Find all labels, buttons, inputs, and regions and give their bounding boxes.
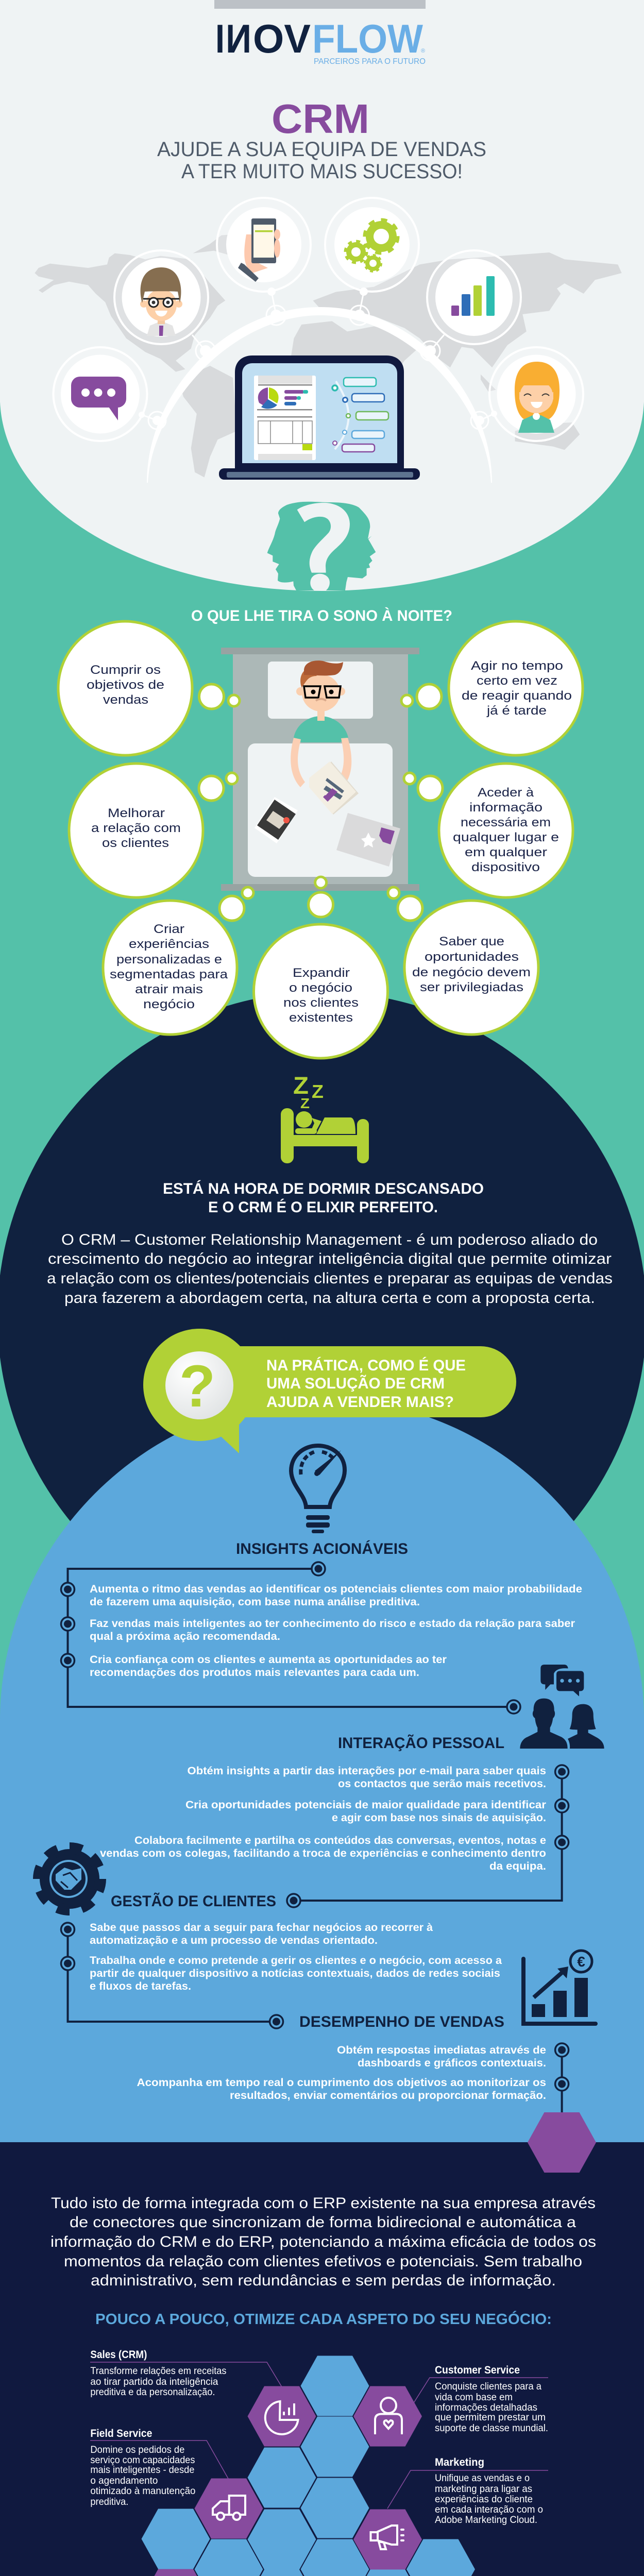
- bubble: Criar experiências: negócio: [143, 997, 195, 1011]
- bubble: Aceder à informação: [439, 764, 573, 897]
- icon: sales chart with euro: €: [577, 1954, 585, 1970]
- text: Sales (CRM): ao tirar partido da inteligência: [90, 2377, 218, 2387]
- text: Marketing: marketing para ligar as: [435, 2484, 532, 2495]
- laptop screen: labelled nodes: [332, 378, 388, 452]
- text: gestão de clientes: automatização e a um processo de vendas orientado.: [90, 1935, 378, 1946]
- bubble: Aceder à informação: Aceder à: [478, 786, 534, 800]
- text: Field Service: Domine os pedidos de: [90, 2445, 184, 2455]
- timeline 2: [287, 1765, 569, 1907]
- text: Sales (CRM): Transforme relações em receitas: [90, 2366, 226, 2377]
- bubble: Criar experiências: atrair mais: [135, 982, 203, 996]
- text: interação pessoal: [100, 1765, 546, 1872]
- bubble: Agir no tempo certo: já é tarde: [486, 704, 547, 718]
- bubble: Expandir o negócio: nos clientes: [283, 996, 359, 1010]
- bubble: Cumprir os objetivos de vendas: Cumprir os: [90, 663, 161, 677]
- bubble: Saber que oportunidades: ser privilegiadas: [420, 980, 523, 994]
- icon: gears circle: [325, 198, 419, 292]
- callout: na prática: ?: [179, 1353, 215, 1419]
- bubble: Cumprir os objetivos de vendas: objetivos de: [87, 678, 164, 692]
- bubble: Criar experiências: segmentadas para: [110, 968, 228, 981]
- bubble: Aceder à informação: qualquer lugar e: [453, 831, 559, 844]
- text: gestão de clientes: e fluxos de tarefas.: [90, 1980, 191, 1992]
- heading: desempenho de vendas: DESEMPENHO DE VENDAS: [299, 2013, 504, 2030]
- bubble: Melhorar a relação: a relação com: [91, 821, 181, 835]
- icon: customer with heart: [375, 2398, 402, 2434]
- navy circle section: [0, 992, 644, 1641]
- bubble: Criar experiências: personalizadas e: [116, 953, 222, 967]
- bubble: Criar experiências: [103, 901, 237, 1035]
- text: insights: [90, 1583, 582, 1679]
- text: interação pessoal: Cria oportunidades potenciais de maior qualidade para identificar: [185, 1799, 546, 1811]
- bubble: Expandir o negócio: existentes: [289, 1011, 353, 1025]
- text: gestão de clientes: partir de qualquer dispositivo a notícias contextuais, dados de redes sociais: [90, 1968, 500, 1979]
- bubble: Melhorar a relação: Melhorar: [108, 806, 165, 820]
- text: Sales (CRM): preditiva e da personalização.: [90, 2387, 215, 2398]
- text: gestão de clientes: [90, 1922, 502, 1992]
- section background: teal: [0, 361, 644, 1752]
- logo: I: [215, 16, 225, 61]
- text: Sales (CRM): [90, 2349, 226, 2398]
- bubble: Criar experiências: experiências: [129, 937, 209, 951]
- text: gestão de clientes: Sabe que passos dar a seguir para fechar negócios ao recorrer à: [90, 1922, 433, 1934]
- logo: OV: [253, 16, 311, 61]
- text: desempenho de vendas: dashboards e gráficos contextuais.: [358, 2057, 546, 2069]
- text: interação pessoal: da equipa.: [489, 1860, 546, 1872]
- laptop: [219, 355, 420, 480]
- text: interação pessoal: e agir com base nos sinais de aquisição.: [332, 1812, 546, 1824]
- bubble: Expandir o negócio: [253, 924, 387, 1058]
- paragraph: CRM description: para fazerem a abordagem certa, na altura certa e com a proposta certa.: [64, 1290, 595, 1307]
- icon: sleeping in bed: Z: [293, 1072, 309, 1099]
- heading: hora de dormir descansado: E O CRM É O ELIXIR PERFEITO.: [208, 1198, 438, 1216]
- bubble: Agir no tempo certo: Agir no tempo: [471, 659, 563, 673]
- bubble: Saber que oportunidades: [404, 901, 538, 1035]
- paragraph: CRM description: crescimento do negócio ao integrar inteligência digital que permite otimizar: [48, 1250, 612, 1267]
- heading: gestão de clientes: GESTÃO DE CLIENTES: [111, 1892, 276, 1910]
- text: Field Service: o agendamento: [90, 2476, 158, 2486]
- bubble: Melhorar a relação: [69, 764, 203, 897]
- callout: na prática: UMA SOLUÇÃO DE CRM: [266, 1375, 445, 1392]
- text: Field Service: mais inteligentes - desde: [90, 2465, 194, 2476]
- icon: two people talking: [520, 1665, 604, 1749]
- paragraph: integração com ERP: de conectores que sincronizam de forma bidirecional e automática a: [70, 2214, 576, 2231]
- subtitle: [157, 138, 486, 183]
- icon: businessman circle: [114, 250, 208, 344]
- bubble: Cumprir os objetivos de vendas: vendas: [103, 693, 148, 707]
- bubble: Saber que oportunidades: Saber que: [439, 935, 504, 948]
- text: Customer Service: Conquiste clientes para a: [435, 2381, 541, 2392]
- text: Customer Service: suporte de classe mundial.: [435, 2423, 548, 2434]
- text: Marketing: [435, 2456, 543, 2526]
- icon: bar chart circle: [427, 250, 521, 344]
- icon: megaphone: [371, 2526, 403, 2549]
- logo: [215, 16, 426, 66]
- section background: light header shape: [0, 0, 644, 591]
- laptop on bed: [336, 813, 400, 867]
- timeline 3: [61, 1923, 283, 2028]
- subtitle: AJUDE A SUA EQUIPA DE VENDAS: [157, 138, 486, 161]
- bed illustration: [221, 648, 419, 891]
- world map: [35, 232, 622, 478]
- logo: N: [226, 16, 251, 61]
- icon: two heads with question mark: [267, 502, 376, 590]
- icon: gear with handshake: [39, 1848, 100, 1910]
- text: interação pessoal: os contactos que serão mais recetivos.: [338, 1778, 546, 1790]
- bubble: Saber que oportunidades: oportunidades: [425, 950, 519, 964]
- icon: lightbulb dial: [291, 1446, 345, 1533]
- text: desempenho de vendas: [137, 2044, 546, 2102]
- text: Field Service: Field Service: [90, 2428, 152, 2439]
- icon: phone in hand circle: [217, 198, 311, 292]
- heading: hora de dormir descansado: [163, 1180, 484, 1216]
- text: interação pessoal: Colabora facilmente e partilha os conteúdos das conversas, eventos, notas e: [134, 1835, 546, 1846]
- bubble: Expandir o negócio: o negócio: [289, 981, 352, 995]
- bubble: Cumprir os objetivos de vendas: [58, 621, 192, 755]
- text: Marketing: Marketing: [435, 2456, 484, 2468]
- paragraph: integração com ERP: momentos da relação com clientes efetivos e potenciais. Sem trabalho: [64, 2253, 582, 2270]
- icon: sales pie chart: [265, 2401, 298, 2434]
- text: desempenho de vendas: Obtém respostas imediatas através de: [337, 2044, 546, 2056]
- logo: ®: [421, 48, 425, 54]
- text: Field Service: serviço com capacidades: [90, 2455, 195, 2466]
- paragraph: integração com ERP: Tudo isto de forma integrada com o ERP existente na sua empresa através: [51, 2195, 596, 2212]
- tablet on bed: [255, 797, 298, 843]
- laptop screen: document: [254, 376, 316, 460]
- section background: dark navy: [0, 2142, 644, 2576]
- bubble: Criar experiências: Criar: [154, 922, 184, 936]
- paragraph: CRM description: a relação com os clientes/potenciais clientes e preparar as equipas de vendas: [47, 1270, 613, 1287]
- text: Field Service: [90, 2428, 195, 2507]
- text: interação pessoal: Obtém insights a partir das interações por e-mail para saber quais: [188, 1765, 546, 1777]
- callout: na prática: AJUDA A VENDER MAIS?: [266, 1394, 454, 1411]
- text: insights: de fazerem uma aquisição, com base numa análise preditiva.: [90, 1596, 420, 1608]
- timeline 4: [555, 2043, 569, 2115]
- text: desempenho de vendas: Acompanha em tempo real o cumprimento dos objetivos ao monitorizar os: [137, 2077, 546, 2089]
- paper on bed: [309, 761, 359, 815]
- hexagon grid: [141, 2355, 475, 2576]
- icon: sleeping in bed: [281, 1072, 369, 1163]
- text: Marketing: Adobe Marketing Cloud.: [435, 2515, 537, 2526]
- timeline 1: [61, 1562, 520, 1714]
- text: Sales (CRM): Sales (CRM): [90, 2349, 147, 2361]
- bubble: Aceder à informação: necessária em: [461, 816, 551, 829]
- icon: sleeping in bed: Z: [312, 1081, 324, 1102]
- heading: O QUE LHE TIRA O SONO: O QUE LHE TIRA O SONO À NOITE?: [191, 607, 452, 624]
- text: gestão de clientes: Trabalha onde e como pretende a gerir os clientes e o negócio, com acesso a: [90, 1955, 502, 1967]
- paragraph: integração com ERP: [50, 2195, 596, 2289]
- icon: woman circle: [489, 347, 583, 441]
- text: Customer Service: informações detalhadas: [435, 2402, 537, 2413]
- logo: FLOW: [312, 16, 423, 61]
- callout: na prática: [143, 1329, 516, 1453]
- text: insights: recomendações dos produtos mais relevantes para cada um.: [90, 1667, 419, 1679]
- bubble: Agir no tempo certo: [449, 621, 583, 755]
- icon: sleeping in bed: Z: [300, 1095, 310, 1111]
- text: Customer Service: Customer Service: [435, 2364, 520, 2376]
- text: insights: Faz vendas mais inteligentes ao ter conhecimento do risco e estado da relação para saber: [90, 1618, 575, 1630]
- thought bubbles: [199, 684, 443, 921]
- icon: sales chart with euro: [523, 1951, 596, 2024]
- bubble: Aceder à informação: informação: [469, 801, 543, 815]
- text: Customer Service: [435, 2364, 548, 2434]
- title: CRM: CRM: [272, 96, 369, 142]
- callout: na prática: NA PRÁTICA, COMO É QUE: [266, 1357, 466, 1374]
- bubble: Aceder à informação: dispositivo: [471, 860, 540, 874]
- icon: truck: [213, 2496, 245, 2520]
- text: Field Service: otimizado à manutenção: [90, 2486, 195, 2497]
- bubble: Aceder à informação: em qualquer: [465, 845, 547, 859]
- logo: PARCEIROS PARA O FUTURO: [314, 57, 426, 66]
- blue section background: [0, 1399, 644, 2142]
- paragraph: integração com ERP: informação do CRM e do ERP, potenciando a máxima eficácia de todos os: [50, 2233, 596, 2250]
- sleepless man: [291, 660, 351, 787]
- text: insights: qual a próxima ação recomendada.: [90, 1631, 280, 1642]
- text: insights: Aumenta o ritmo das vendas ao identificar os potenciais clientes com maior probabilidade: [90, 1583, 582, 1595]
- text: Marketing: experiências do cliente: [435, 2494, 533, 2505]
- text: desempenho de vendas: resultados, enviar comentários ou proporcionar formação.: [230, 2090, 546, 2102]
- text: Marketing: Unifique as vendas e o: [435, 2473, 530, 2484]
- text: Customer Service: que permitem prestar um: [435, 2412, 546, 2423]
- callout lines: [90, 2362, 549, 2576]
- bubble: Saber que oportunidades: de negócio devem: [412, 965, 531, 979]
- bubble: Expandir o negócio: Expandir: [293, 966, 350, 980]
- heading: interação pessoal: INTERAÇÃO PESSOAL: [338, 1734, 504, 1752]
- heading: insights acionáveis: INSIGHTS ACIONÁVEIS: [236, 1540, 408, 1557]
- bubble: Melhorar a relação: os clientes: [102, 836, 169, 850]
- heading: hora de dormir descansado: ESTÁ NA HORA DE DORMIR DESCANSADO: [163, 1180, 484, 1197]
- text: insights: Cria confiança com os clientes e aumenta as oportunidades ao ter: [90, 1654, 447, 1666]
- text: Customer Service: vida com base em: [435, 2392, 513, 2403]
- arc connecting the circles: [139, 287, 497, 483]
- paragraph: integração com ERP: administrativo, sem redundâncias e sem perdas de informação.: [91, 2272, 556, 2289]
- heading: pouco a pouco: POUCO A POUCO, OTIMIZE CADA ASPETO DO SEU NEGÓCIO:: [95, 2310, 552, 2328]
- paragraph: CRM description: [47, 1231, 613, 1307]
- purple hexagon: [528, 2112, 596, 2173]
- text: interação pessoal: vendas com os colegas, facilitando a troca de experiências e conhecimento dentro: [100, 1848, 546, 1859]
- bubble: Agir no tempo certo: de reagir quando: [462, 689, 572, 703]
- subtitle: A TER MUITO MAIS SUCESSO!: [181, 160, 463, 183]
- icon: chat circle: [54, 347, 147, 441]
- bubble: Agir no tempo certo: certo em vez: [477, 674, 557, 688]
- text: Field Service: preditiva.: [90, 2497, 128, 2507]
- paragraph: CRM description: O CRM – Customer Relationship Management - é um poderoso aliado do: [61, 1231, 598, 1248]
- top tab: [214, 0, 426, 9]
- text: Marketing: em cada interação com o: [435, 2504, 543, 2515]
